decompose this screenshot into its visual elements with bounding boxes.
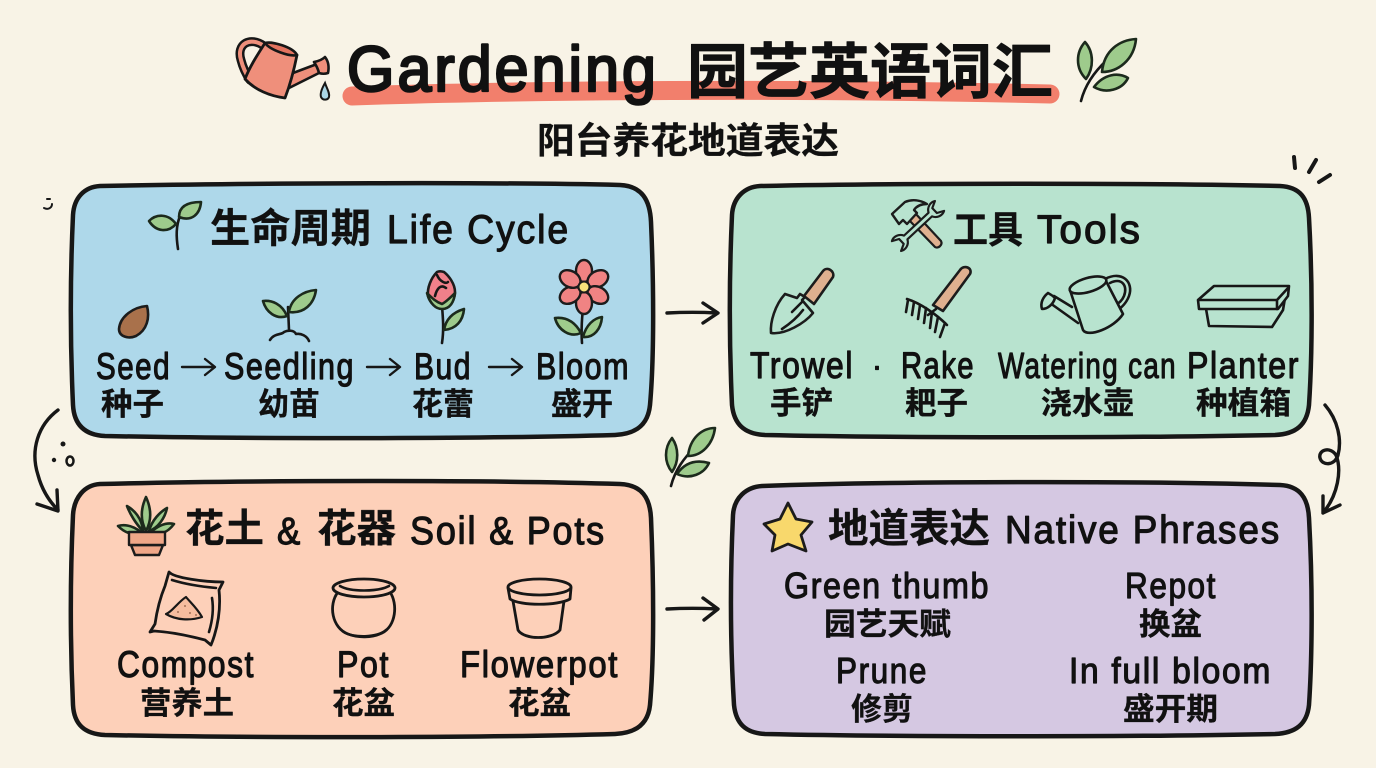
words: life cycle: 幼苗 [258,379,320,424]
icon: compost bag [150,572,223,645]
words: life cycle: 盛开 [551,379,613,424]
words: tools [750,345,1300,423]
arrow: soil to phrases [667,598,718,620]
heading: life cycle: Life Cycle [387,208,570,252]
heading: tools: 工具 [953,199,1023,254]
words: tools: Rake [901,345,975,386]
words: tools: 种植箱 [1196,378,1291,423]
phrase: prune: 修剪 [851,684,913,729]
phrase: in full bloom: 盛开期 [1123,684,1218,729]
icon: bud [427,271,464,343]
icon: center leaf sprig [666,428,715,486]
icon: bloom flower [555,260,611,343]
icon: hammer and wrench [891,200,945,252]
words: life cycle: Bloom [536,346,630,387]
arrows: life cycle [182,359,522,375]
words: soil and pots: Flowerpot [460,644,619,685]
title [347,24,1053,111]
panel: soil and pots [71,481,653,737]
words: soil and pots: Compost [117,644,255,685]
phrase: prune: Prune [836,650,928,691]
icon: seed [119,306,148,337]
icon: leaf sprig title [1078,39,1136,101]
words: life cycle: 花蕾 [412,379,474,424]
icon: star [764,503,812,551]
panel: tools [730,184,1312,437]
heading: life cycle: 生命周期 [210,196,371,254]
icon: round pot [333,579,395,637]
icon: trowel [771,269,833,333]
arrow: life cycle to soil [35,410,58,511]
icon: rake [906,267,971,337]
decorative marks: dots [44,199,74,466]
phrase: green thumb [784,565,990,644]
words: soil and pots: 花盆 [508,678,571,723]
words: life cycle: Seed [96,346,171,387]
subtitle: 阳台养花地道表达 [537,112,839,164]
words: soil and pots [117,644,619,723]
phrase: green thumb: 园艺天赋 [824,599,951,644]
title: Gardening [347,33,659,105]
words: tools: Watering can [998,345,1177,386]
phrase: repot [1125,565,1217,644]
words: life cycle: Bud [414,346,472,387]
heading: soil and pots: Soil & Pots [410,510,606,553]
words: soil and pots: 营养土 [140,678,234,723]
phrase: repot: 换盆 [1139,599,1202,644]
title: 园艺英语词汇 [687,24,1053,111]
words: life cycle: 种子 [101,379,164,424]
icon: sprout [149,202,201,249]
heading: soil and pots: 花器 [317,498,396,554]
arrow: tools to phrases [1320,405,1340,513]
heading: soil and pots: 花土 [185,498,264,554]
icon: potted plant [118,497,174,555]
words: soil and pots: Pot [337,644,390,685]
icon: tool watering can [1041,273,1130,333]
heading: tools: Tools [1037,208,1142,252]
heading: native phrases: 地道表达 [828,496,990,554]
arrow: life cycle to tools [667,303,718,323]
heading: native phrases: Native Phrases [1005,509,1281,552]
heading: life cycle [210,196,570,254]
phrase: prune [836,650,928,729]
phrase: in full bloom [1069,650,1272,729]
phrase: repot: Repot [1125,565,1217,606]
words: tools: Planter [1187,345,1300,386]
words: life cycle: Seedling [224,346,355,387]
words: tools: 手铲 [770,378,833,423]
words: soil and pots: 花盆 [332,678,395,723]
words: tools: 浇水壶 [1041,378,1134,423]
panel: life cycle [71,183,653,438]
icon: seedling [263,290,316,341]
words: tools: 耙子 [905,378,968,423]
phrase: in full bloom: In full bloom [1069,650,1272,691]
icon: planter box [1198,286,1289,327]
heading: tools [953,199,1142,254]
words: tools: Trowel [750,345,854,386]
heading: native phrases [828,496,1281,554]
phrase: green thumb: Green thumb [784,565,990,606]
decorative marks: sparkle [1294,157,1330,182]
heading: soil and pots [185,498,606,554]
heading: soil and pots: & [277,511,302,553]
words: life cycle [96,346,630,424]
icon: flowerpot [508,579,571,638]
icon: watering can [240,42,329,100]
panel: native phrases [731,482,1312,736]
words: tools: · [872,350,884,383]
